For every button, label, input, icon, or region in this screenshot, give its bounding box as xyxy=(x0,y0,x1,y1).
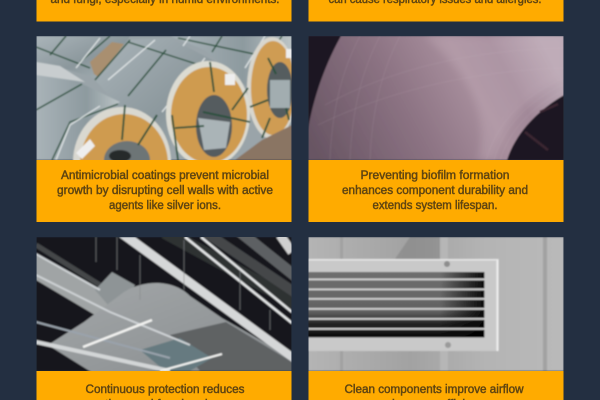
duct junction xyxy=(95,272,135,305)
dark core details xyxy=(525,104,558,150)
screws xyxy=(444,261,450,267)
straps xyxy=(36,36,292,160)
photo: wall air vent xyxy=(300,237,564,371)
caption box xyxy=(308,371,564,400)
caption box xyxy=(308,160,564,222)
panel: clean components xyxy=(300,237,564,400)
caption text xyxy=(342,170,528,212)
front coil body xyxy=(36,72,120,160)
louvres xyxy=(300,278,485,330)
face straps xyxy=(122,58,289,160)
panel: biofilm prevention xyxy=(308,36,564,222)
caption text: agents like silver ions. xyxy=(109,200,221,212)
upper left duct xyxy=(36,255,108,315)
hangers xyxy=(96,237,270,330)
caption box xyxy=(36,371,292,400)
middle coil xyxy=(166,61,250,167)
photo: ceiling ductwork xyxy=(36,232,300,375)
panel: microbial growth caption, left xyxy=(36,0,292,22)
panel: respiratory caption, right xyxy=(308,0,564,22)
caption text: Clean components improve airflow xyxy=(344,384,524,396)
caption text: growth by disrupting cell walls with active xyxy=(57,185,273,197)
caption text: Continuous protection reduces xyxy=(86,384,245,396)
back right coil body xyxy=(173,36,292,85)
photo: steel coils xyxy=(36,36,292,160)
left rails xyxy=(36,254,190,345)
caption text xyxy=(57,170,273,212)
light fixtures xyxy=(83,320,152,347)
panel: antimicrobial coatings xyxy=(36,36,297,222)
panel: continuous protection xyxy=(36,232,300,400)
vent frame xyxy=(300,259,498,351)
white bands xyxy=(56,36,265,160)
fine concentric sheet lines xyxy=(333,98,377,119)
right coil xyxy=(247,37,297,139)
back left coil xyxy=(36,36,128,71)
duct underside xyxy=(170,322,292,371)
labels xyxy=(225,74,235,85)
caption text: Preventing biofilm formation xyxy=(360,170,510,182)
photo: brushed metal coil xyxy=(308,36,564,160)
middle coil body xyxy=(98,41,210,134)
vent opening xyxy=(300,272,484,338)
white structural beam xyxy=(119,237,292,362)
glass panel xyxy=(140,338,212,371)
caption text: extends system lifespan. xyxy=(372,200,498,212)
pipes xyxy=(36,232,300,323)
brushed highlight xyxy=(425,36,564,160)
caption text: Antimicrobial coatings prevent microbial xyxy=(61,170,269,182)
front coil xyxy=(72,106,172,160)
main duct elbow xyxy=(48,283,292,375)
caption text: enhances component durability and xyxy=(342,185,528,197)
wood floor xyxy=(235,125,292,160)
caption box xyxy=(36,160,292,222)
